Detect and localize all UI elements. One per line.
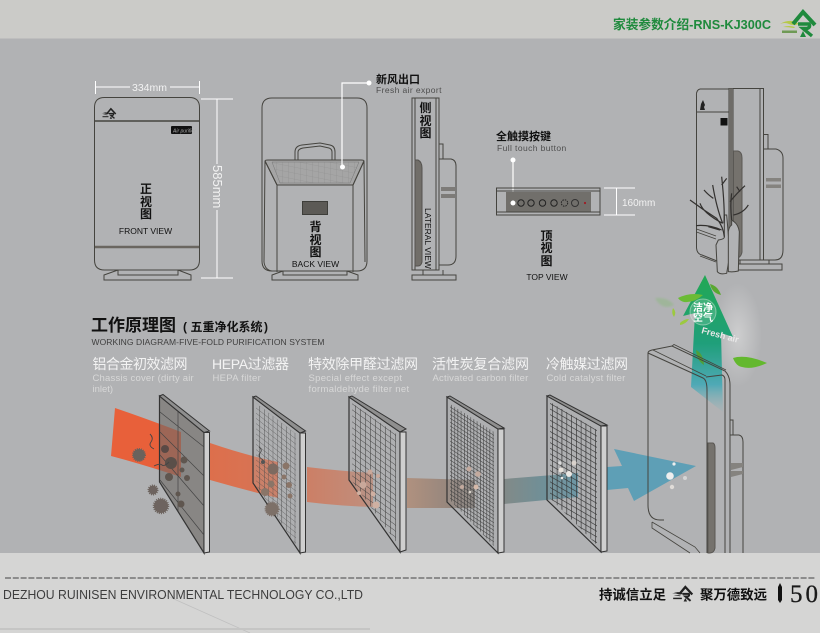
base bbox=[272, 271, 358, 280]
front view label: 视 bbox=[140, 195, 152, 209]
filter 4: activated carbon bbox=[447, 396, 504, 553]
company name: DEZHOU RUINISEN ENVIRONMENTAL TECHNOLOGY CO.,LTD bbox=[3, 587, 363, 602]
back view label bbox=[292, 219, 339, 269]
badge bbox=[720, 118, 728, 126]
clean air particles bbox=[666, 462, 687, 489]
heading: working diagram: 工作原理图 bbox=[91, 316, 176, 335]
header bar bbox=[0, 0, 820, 38]
icon: footer logo bbox=[672, 587, 692, 601]
icon: brand mark bbox=[102, 109, 116, 119]
callout: full touch button: 全触摸按键 bbox=[496, 129, 551, 143]
width dimension bbox=[96, 81, 200, 94]
callout: fresh air export: Fresh air export bbox=[376, 85, 442, 95]
label: filter 1: Chassis cover (dirty air bbox=[92, 373, 194, 384]
rear module bbox=[764, 134, 783, 260]
filter 2: HEPA bbox=[253, 396, 306, 553]
front view label bbox=[119, 182, 172, 236]
white haze bbox=[714, 283, 762, 387]
callout: fresh air export: 新风出口 bbox=[376, 72, 420, 86]
label: filter 3: formaldehyde filter net bbox=[308, 384, 409, 395]
panel: front view bbox=[94, 81, 233, 280]
device top outline bbox=[496, 188, 600, 215]
dark stripe bbox=[729, 88, 733, 264]
dark side panel bbox=[415, 160, 422, 266]
filter 1: chassis cover bbox=[160, 394, 210, 553]
control panel bbox=[506, 192, 591, 212]
label: filter 1: 铝合金初效滤网 bbox=[92, 356, 188, 372]
badge: Air purifier bbox=[172, 128, 196, 134]
label: filter 3: 特效除甲醛过滤网 bbox=[308, 356, 418, 372]
icon: brand mark bbox=[700, 100, 705, 110]
device outline bbox=[696, 88, 764, 268]
panel: back view bbox=[262, 72, 442, 280]
heading: working diagram bbox=[91, 316, 324, 347]
height dimension: 160mm bbox=[622, 198, 655, 209]
top view label: 顶 bbox=[540, 229, 553, 243]
label: filter 2: HEPA过滤器 bbox=[212, 356, 289, 372]
label: filter 4 bbox=[432, 356, 529, 384]
label: filter 4: 活性炭复合滤网 bbox=[432, 356, 529, 372]
display window bbox=[302, 202, 328, 214]
header title: 家装参数介绍-RNS-KJ300C bbox=[613, 17, 772, 32]
back view label: 背 bbox=[309, 219, 322, 234]
callout: full touch button: Full touch button bbox=[497, 143, 567, 153]
label: filter 5: Cold catalyst filter bbox=[546, 373, 625, 384]
lateral label: 视 bbox=[419, 114, 432, 128]
back view label: 视 bbox=[309, 233, 322, 247]
heading: working diagram: 五重净化系统 bbox=[190, 319, 263, 334]
base bbox=[412, 270, 456, 280]
text: filter labels bbox=[92, 356, 628, 395]
label: filter 3: Special effect except bbox=[308, 373, 402, 384]
width dimension: 334mm bbox=[132, 82, 167, 94]
device outline bbox=[412, 98, 439, 270]
dark side panel bbox=[734, 151, 742, 258]
handle bbox=[295, 143, 335, 160]
callout: fresh air export bbox=[340, 72, 442, 170]
top view label bbox=[526, 229, 568, 282]
slogan right: 聚万德致远 bbox=[700, 586, 767, 602]
back view label: BACK VIEW bbox=[292, 259, 339, 269]
device: purifier receiving air bbox=[648, 344, 743, 553]
label: filter 3 bbox=[308, 356, 418, 395]
filter cover bbox=[265, 160, 364, 185]
base bbox=[104, 270, 191, 280]
vases bbox=[716, 215, 739, 274]
filter 3: formaldehyde bbox=[349, 396, 406, 552]
label: filter 5: 冷触媒过滤网 bbox=[546, 356, 628, 372]
heading: working diagram: ( bbox=[183, 320, 187, 334]
lateral label: LATERAL VIEW bbox=[423, 208, 433, 269]
back view label: 图 bbox=[309, 245, 322, 259]
panel: footer bbox=[0, 553, 820, 633]
front view label: FRONT VIEW bbox=[119, 226, 172, 236]
label: filter 2: HEPA filter bbox=[212, 373, 261, 384]
panel: lateral view bbox=[412, 98, 456, 280]
fresh air badge: 洁净 bbox=[693, 301, 713, 314]
panel: top view bbox=[496, 129, 655, 282]
fresh air badge: 空气 bbox=[693, 311, 713, 324]
label: filter 2 bbox=[212, 356, 289, 384]
page divider bbox=[778, 583, 782, 603]
lateral label: 侧 bbox=[419, 101, 432, 115]
lateral label bbox=[419, 101, 433, 269]
callout: full touch button bbox=[496, 129, 567, 206]
air flow band bbox=[111, 408, 696, 508]
icon: company logo bbox=[780, 12, 815, 37]
filter 5: cold catalyst bbox=[547, 395, 607, 552]
top view label: 图 bbox=[540, 254, 553, 268]
lateral label: 图 bbox=[419, 126, 432, 140]
height dimension bbox=[604, 188, 655, 215]
fresh air text: Fresh air bbox=[700, 325, 740, 345]
pollutant particles bbox=[133, 434, 576, 516]
heading: working diagram: ) bbox=[264, 320, 268, 334]
heading english: WORKING DIAGRAM-FIVE-FOLD PURIFICATION SYSTEM bbox=[92, 337, 324, 347]
label: filter 5 bbox=[546, 356, 628, 384]
label: filter 4: Activated carbon filter bbox=[432, 373, 528, 384]
badge bbox=[171, 126, 196, 134]
device outline bbox=[94, 98, 200, 270]
label: filter 1: inlet) bbox=[92, 384, 113, 395]
arrow: cleaned air bbox=[607, 449, 696, 501]
leaves bbox=[655, 284, 767, 368]
top view label: TOP VIEW bbox=[526, 272, 568, 282]
rear module bbox=[439, 144, 456, 265]
front view label: 图 bbox=[140, 207, 152, 221]
device outline bbox=[262, 98, 367, 271]
slogan left: 持诚信立足 bbox=[599, 586, 666, 602]
height dimension bbox=[201, 99, 233, 278]
dark side panel bbox=[708, 443, 715, 553]
top view label: 视 bbox=[540, 241, 553, 255]
height dimension: 585mm bbox=[210, 165, 225, 208]
front view label: 正 bbox=[140, 182, 152, 196]
tree branches bbox=[690, 177, 748, 237]
label: filter 1 bbox=[92, 356, 194, 395]
rear module bbox=[730, 420, 743, 553]
base bbox=[738, 260, 782, 270]
arrow: fresh air bbox=[683, 275, 740, 412]
panel: perspective product view bbox=[690, 88, 783, 274]
fresh air badge bbox=[690, 299, 716, 325]
